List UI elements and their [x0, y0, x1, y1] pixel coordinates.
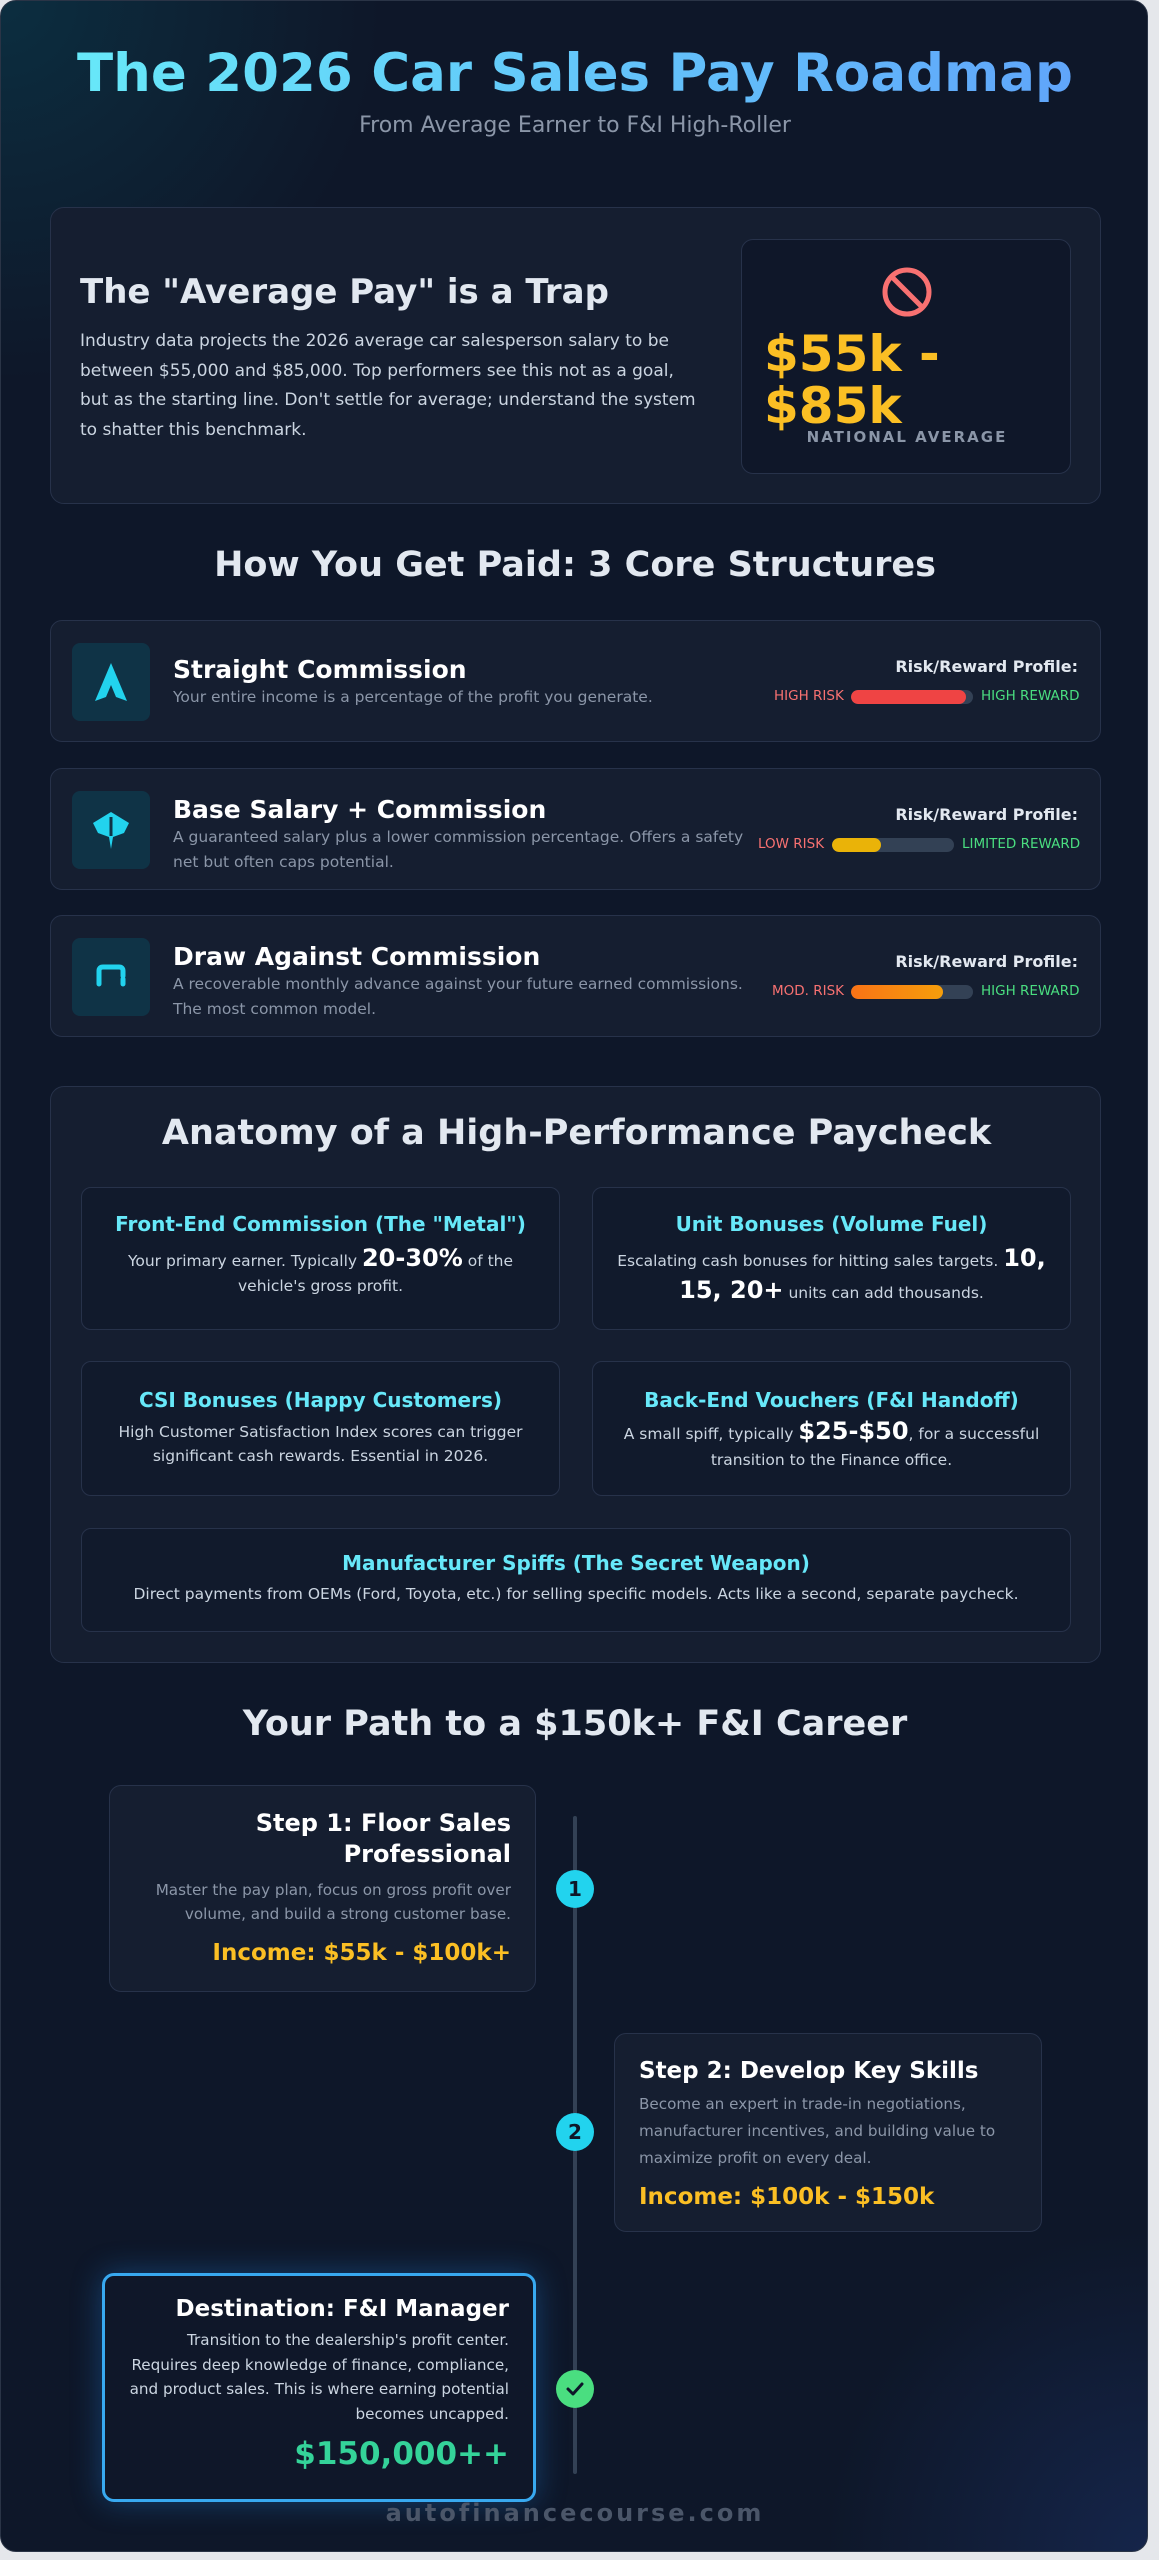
step 2 card: Income: $100k - $150k	[639, 2184, 934, 2210]
card: base salary: LIMITED REWARD	[962, 836, 1080, 852]
label: NATIONAL AVERAGE	[807, 428, 1007, 446]
destination card: Transition to the dealership's profit center.	[187, 2331, 509, 2349]
sub: manufacturer spiffs	[81, 1528, 1071, 1632]
step 1 card: Step 1: Floor Sales	[256, 1809, 511, 1837]
destination card: Destination: F&I Manager	[176, 2296, 509, 2322]
step 1 card: Professional	[344, 1840, 511, 1868]
destination card: becomes uncapped.	[355, 2404, 509, 2422]
step 2 card: Step 2: Develop Key Skills	[639, 2058, 978, 2084]
step 1 card	[109, 1785, 536, 1992]
heading: structures: How You Get Paid: 3 Core Structures	[214, 545, 936, 585]
description: A guaranteed salary plus a lower commission percentage. Offers a safety net but often caps potential.	[173, 828, 743, 871]
risk profile: Risk/Reward Profile:	[895, 657, 1078, 676]
card: base salary: LOW RISK	[758, 836, 824, 852]
body text: between $55,000 and $85,000. Top performers see this not as a goal,	[80, 360, 674, 380]
sub: front-end: Your primary earner. Typically 20-30% of the	[128, 1244, 513, 1272]
sub: CSI: High Customer Satisfaction Index scores can trigger	[118, 1423, 523, 1441]
title: The 2026 Car Sales Pay Roadmap	[77, 43, 1073, 104]
title: Draw Against Commission	[173, 942, 540, 971]
step 2 card: maximize profit on every deal.	[639, 2149, 871, 2167]
subtitle: From Average Earner to F&I High-Roller	[359, 113, 791, 138]
sub: front-end: Front-End Commission (The "Metal")	[115, 1212, 526, 1236]
sub: back-end: Back-End Vouchers (F&I Handoff)	[644, 1388, 1019, 1412]
card: base salary	[50, 768, 1101, 890]
marker 2: 2	[568, 2120, 582, 2144]
body text: but as the starting line. Don't settle for average; understand the system	[80, 390, 696, 410]
step 2 card: Become an expert in trade-in negotiations,	[639, 2095, 966, 2113]
card: draw against commission	[50, 915, 1101, 1037]
body text: to shatter this benchmark.	[80, 420, 306, 440]
card: straight commission: HIGH RISK	[774, 688, 844, 704]
amount: $85k	[764, 377, 902, 435]
sub: back-end: transition to the Finance office.	[711, 1451, 952, 1469]
destination card: $150,000++	[294, 2436, 509, 2472]
icon: prohibited	[882, 268, 932, 316]
card: draw against commission: HIGH REWARD	[981, 983, 1080, 999]
card: straight commission: HIGH REWARD	[981, 688, 1080, 704]
sub: CSI: CSI Bonuses (Happy Customers)	[139, 1388, 502, 1412]
title: Base Salary + Commission	[173, 795, 546, 824]
marker 2	[556, 2113, 594, 2151]
destination card	[102, 2273, 536, 2502]
timeline line	[573, 1816, 577, 2474]
destination card: and product sales. This is where earning potential	[130, 2380, 509, 2398]
sub: back-end	[592, 1361, 1071, 1496]
card: draw against commission: MOD. RISK	[772, 983, 844, 999]
body text: Industry data projects the 2026 average car salesperson salary to be	[80, 331, 669, 351]
step 2 card: manufacturer incentives, and building value to	[639, 2122, 995, 2140]
footer: autofinancecourse.com	[386, 2499, 764, 2527]
step 1 card: volume, and build a strong customer base.	[185, 1905, 511, 1923]
marker 1: 1	[568, 1877, 582, 1901]
heading: The "Average Pay" is a Trap	[80, 272, 609, 312]
title: Straight Commission	[173, 655, 467, 684]
icon: bracket	[72, 938, 150, 1016]
description: Your entire income is a percentage of the profit you generate.	[173, 688, 653, 706]
panel: anatomy	[50, 1086, 1101, 1663]
card: straight commission	[50, 620, 1101, 742]
sub: front-end	[81, 1187, 560, 1330]
description: A recoverable monthly advance against your future earned commissions. The most common model.	[173, 975, 743, 1018]
stat box	[741, 239, 1071, 474]
sub: CSI	[81, 1361, 560, 1496]
heading: path: Your Path to a $150k+ F&I Career	[243, 1704, 907, 1744]
step 2 card	[614, 2033, 1042, 2232]
sub: manufacturer spiffs: Direct payments from OEMs (Ford, Toyota, etc.) for selling specific models. Acts like a second, separate paycheck.	[133, 1585, 1019, 1603]
risk profile: Risk/Reward Profile:	[895, 952, 1078, 971]
body text	[80, 331, 696, 440]
destination card: Requires deep knowledge of finance, compliance,	[131, 2356, 509, 2374]
amount	[764, 325, 940, 435]
sub: manufacturer spiffs: Manufacturer Spiffs (The Secret Weapon)	[342, 1551, 810, 1575]
sub: unit bonuses: 15, 20+ units can add thousands.	[679, 1276, 984, 1304]
panel: average pay trap	[50, 207, 1101, 504]
sub: unit bonuses: Escalating cash bonuses for hitting sales targets. 10,	[617, 1244, 1046, 1272]
sub: front-end: vehicle's gross profit.	[238, 1277, 403, 1295]
heading: Anatomy of a High-Performance Paycheck	[162, 1113, 991, 1153]
sub: back-end: A small spiff, typically $25-$50, for a successful	[624, 1417, 1039, 1445]
marker: check	[556, 2370, 594, 2408]
step 1 card: Master the pay plan, focus on gross profit over	[156, 1881, 511, 1899]
sub: unit bonuses: Unit Bonuses (Volume Fuel)	[676, 1212, 987, 1236]
icon: arrow	[72, 643, 150, 721]
sub: CSI: significant cash rewards. Essential in 2026.	[153, 1447, 488, 1465]
icon: shield	[72, 791, 150, 869]
sub: unit bonuses	[592, 1187, 1071, 1330]
amount: $55k -	[764, 325, 940, 383]
risk profile: Risk/Reward Profile:	[895, 805, 1078, 824]
marker 1	[556, 1870, 594, 1908]
step 1 card: Income: $55k - $100k+	[212, 1940, 511, 1966]
